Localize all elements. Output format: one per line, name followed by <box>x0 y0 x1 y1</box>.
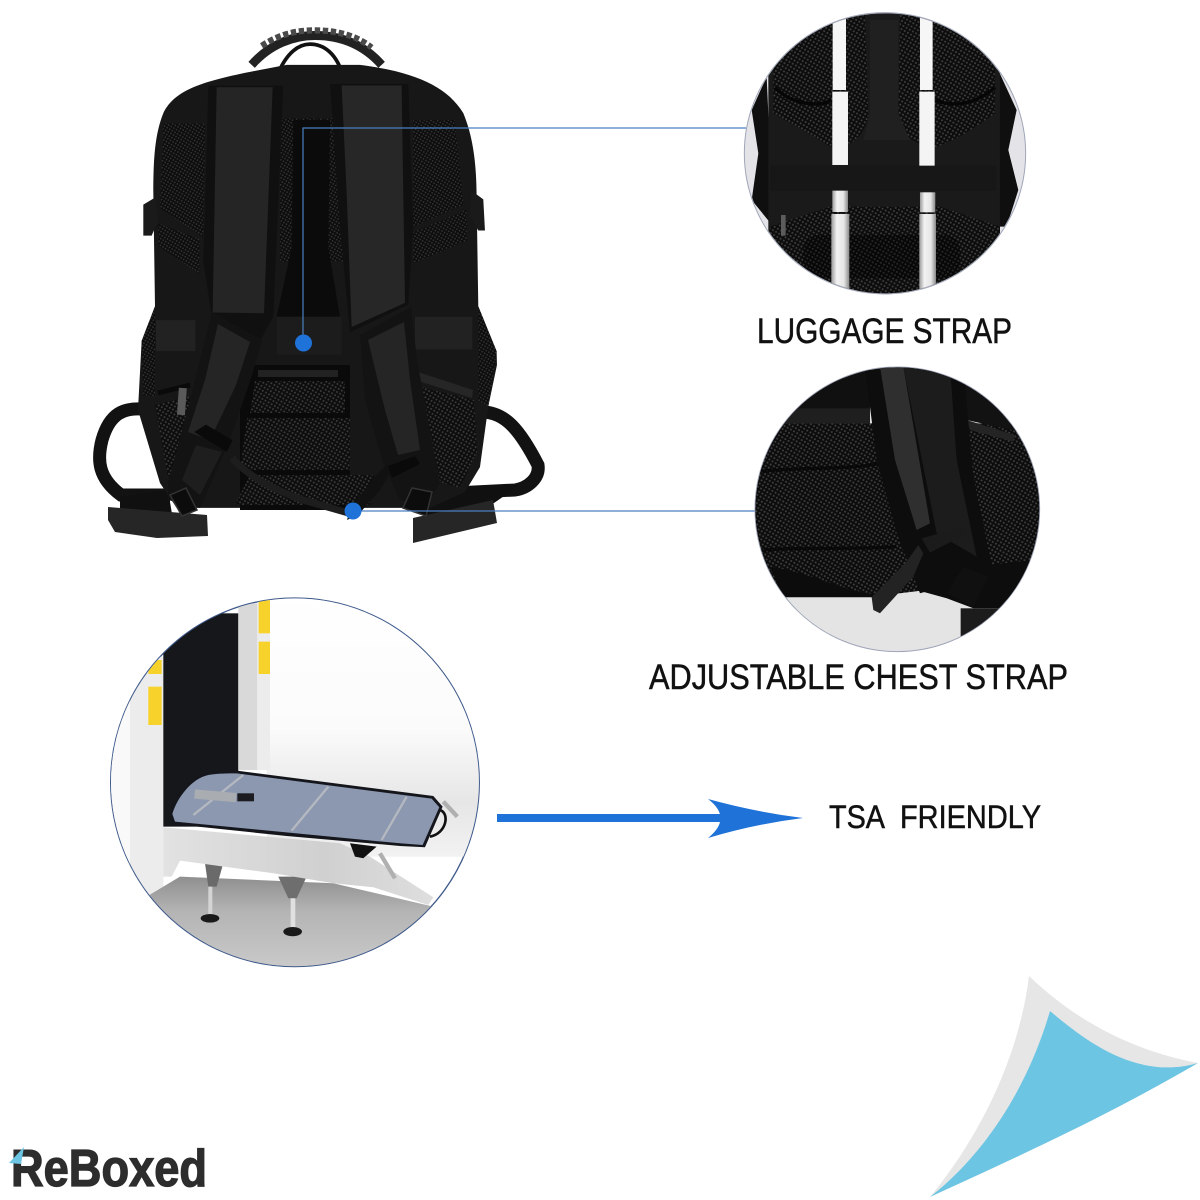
table legs <box>201 863 307 936</box>
connector line: chest strap <box>353 510 757 512</box>
mesh panels <box>142 118 497 406</box>
connector line: luggage strap <box>303 128 746 343</box>
corner peel: blue face <box>930 1011 1198 1197</box>
right loop strap <box>413 412 538 543</box>
pad seams <box>775 87 995 104</box>
wall <box>267 590 490 857</box>
left trolley rod <box>831 17 849 291</box>
side pads <box>156 317 472 351</box>
strap end <box>960 608 1000 636</box>
right shoulder strap <box>330 84 413 332</box>
strap band <box>770 166 997 191</box>
shoulder strap <box>865 367 993 593</box>
back panel <box>768 10 1000 297</box>
circle: chest strap detail <box>754 366 1040 652</box>
corner peel: grey back <box>930 976 1198 1197</box>
conveyor table <box>163 827 433 905</box>
luggage strap band <box>277 317 342 355</box>
mesh panel <box>755 423 1040 600</box>
scanner tunnel <box>163 613 238 827</box>
zip pocket <box>158 385 190 415</box>
floor <box>150 876 431 966</box>
zipper pull <box>781 215 786 236</box>
left shoulder strap <box>203 86 283 341</box>
arrow: TSA to label <box>497 799 803 838</box>
yellow labels <box>148 600 270 725</box>
label: adjustable chest strap: ADJUSTABLE CHEST STRAP <box>649 658 1068 697</box>
side buckles <box>143 191 485 236</box>
chest strap with buckles <box>170 427 432 520</box>
lower mesh pads <box>155 365 477 510</box>
lower right strap <box>360 307 440 503</box>
circle: TSA scanner scene <box>110 590 490 977</box>
lower left strap <box>168 312 262 508</box>
left loop strap <box>100 409 208 538</box>
backpack body <box>138 65 497 508</box>
backpack on conveyor <box>170 770 457 878</box>
lower pad <box>803 235 960 278</box>
marker dot: chest strap <box>344 502 362 520</box>
top handle <box>252 30 382 77</box>
side straps of bag <box>752 67 1018 227</box>
centre back panel <box>277 120 340 317</box>
right frame <box>238 603 257 770</box>
right trolley rod <box>919 17 936 291</box>
label: TSA friendly: TSA <box>829 799 885 835</box>
upper dark band <box>784 370 870 424</box>
left frame <box>110 657 163 897</box>
mesh pads <box>770 10 1000 297</box>
upper straps <box>203 84 413 341</box>
label: TSA friendly: FRIENDLY <box>900 799 1041 835</box>
seams <box>757 463 897 550</box>
circle: luggage strap detail <box>744 10 1026 297</box>
centre spine <box>898 114 908 136</box>
marker dot: luggage strap <box>295 334 312 352</box>
upper body <box>138 65 497 508</box>
label: luggage strap: LUGGAGE STRAP <box>757 312 1012 351</box>
lower webbing <box>770 567 873 597</box>
label: TSA friendly <box>829 799 1041 835</box>
logo: ReBoxed: ReBoxed <box>11 1140 207 1198</box>
backpack rear view <box>100 30 538 543</box>
buckle <box>872 545 923 613</box>
